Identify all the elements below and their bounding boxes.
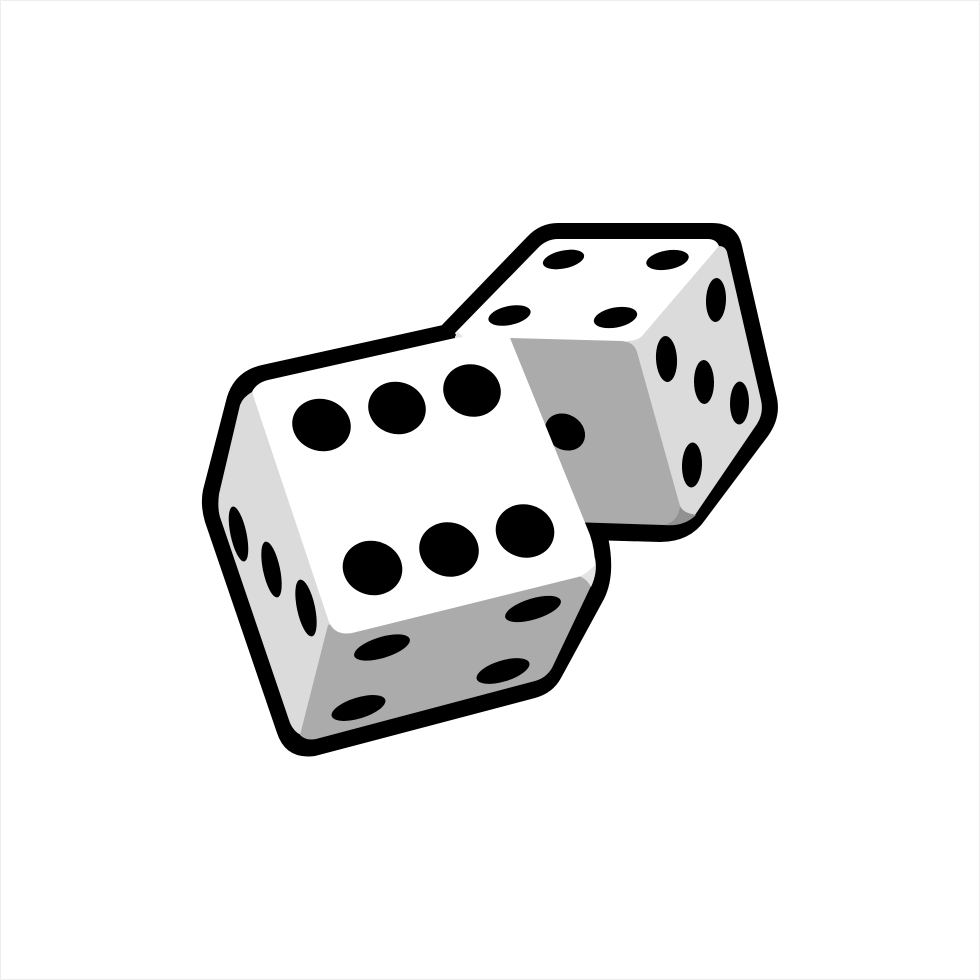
- back die top pips: [486, 246, 690, 332]
- front die right corner highlight: [575, 558, 596, 587]
- front die outline: [202, 325, 611, 757]
- back die front pip: [538, 406, 592, 458]
- front die left pips: [225, 505, 321, 638]
- front die top pips: [286, 358, 560, 602]
- front die left face: [218, 392, 345, 735]
- back die top face: [455, 239, 719, 360]
- back die right face: [625, 246, 762, 515]
- front die bottom pips: [329, 590, 564, 726]
- back die corner shade: [664, 506, 696, 525]
- front die corner highlight: [455, 331, 463, 338]
- front die bottom face: [300, 570, 591, 740]
- front die: [202, 325, 611, 757]
- back die right pips: [655, 278, 749, 488]
- back die: [442, 223, 778, 542]
- back die outline: [442, 223, 778, 542]
- front die top face: [252, 331, 595, 634]
- back die front face: [510, 338, 692, 525]
